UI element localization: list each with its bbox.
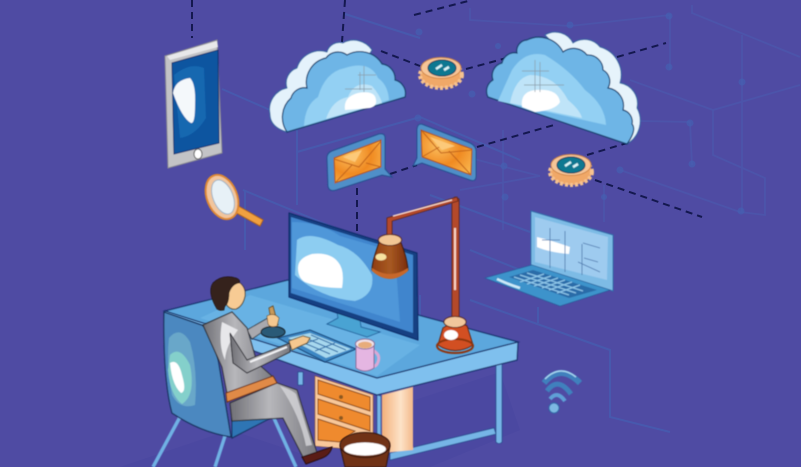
- chair seat: [232, 402, 288, 438]
- monitor stand: [327, 312, 380, 337]
- person: far arm and hand: [247, 318, 271, 339]
- circuit board lines: [222, 14, 670, 432]
- lamp shade: [372, 238, 408, 278]
- desk lamp: [372, 197, 473, 353]
- lamp base: [438, 323, 473, 350]
- dashed connector lines: [192, 0, 702, 231]
- person: head: [226, 282, 245, 309]
- desk legs: [298, 360, 502, 462]
- icon: magnifying glass: [199, 170, 263, 226]
- icon: smartphone: [165, 40, 222, 168]
- keyboard: [278, 330, 356, 362]
- icon: right cloud: [487, 32, 640, 144]
- icon: wifi signal: [544, 371, 580, 413]
- person: near arm and hand: [230, 333, 290, 373]
- icon: laptop: [485, 211, 613, 306]
- faint right circuit lines: [460, 5, 800, 230]
- person: legs: [230, 383, 317, 457]
- mug: [356, 339, 379, 371]
- person: orange cushion: [226, 376, 277, 402]
- circuit nodes: [414, 12, 746, 214]
- lamp arm: [452, 197, 459, 318]
- chair back: [164, 312, 231, 437]
- drawer cabinet: [315, 376, 413, 453]
- floor shadow: [120, 372, 520, 467]
- icon: right email bubble: [413, 124, 476, 180]
- office chair: [153, 312, 296, 467]
- desk top: [165, 311, 518, 395]
- waste bin: [340, 432, 390, 467]
- icon: gear lower: [550, 154, 592, 185]
- person at desk: [203, 277, 332, 464]
- person: shoe: [302, 447, 332, 464]
- person: torso: [203, 312, 273, 393]
- icon: left email bubble: [327, 134, 392, 190]
- chair legs: [153, 416, 296, 467]
- icon: gear top: [420, 58, 462, 88]
- icon: left cloud: [270, 40, 405, 132]
- monitor: [289, 213, 418, 340]
- desk: [165, 280, 518, 462]
